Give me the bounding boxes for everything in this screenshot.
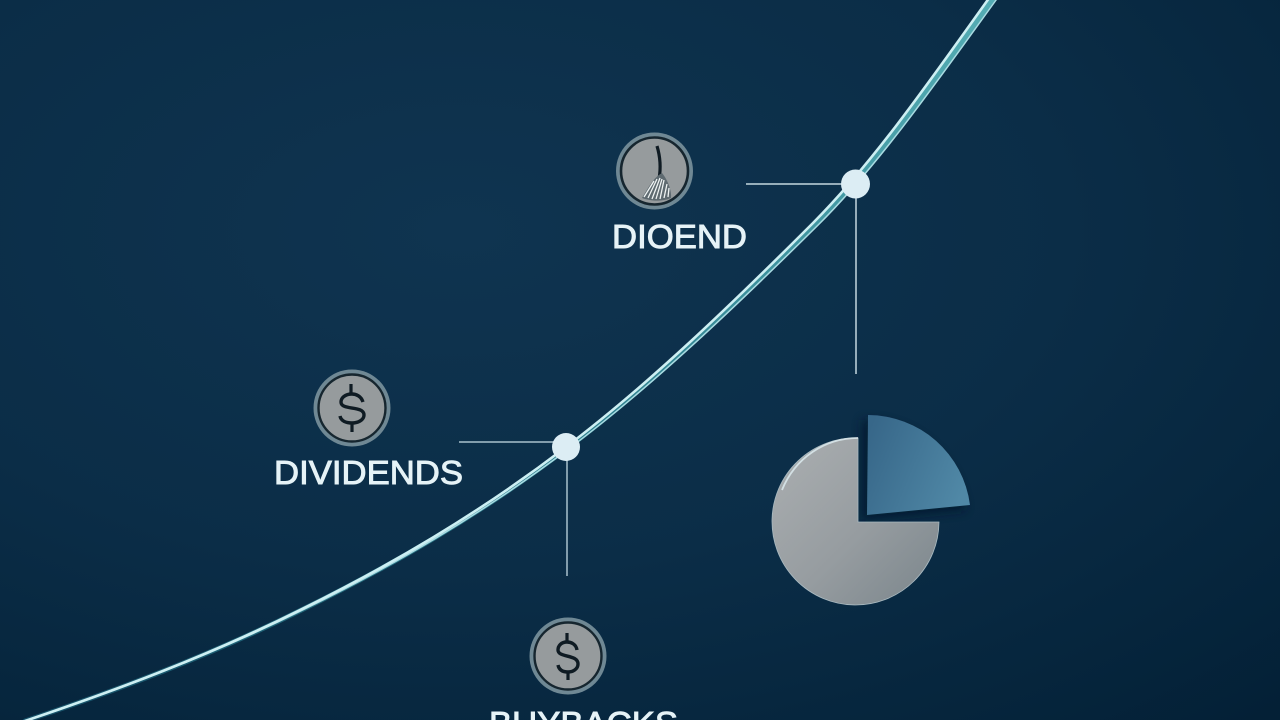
blue pie slice <box>867 415 970 515</box>
connector lines: lower point <box>459 442 567 576</box>
large grey pie slice <box>772 438 939 605</box>
connector lines: upper point <box>746 184 856 374</box>
lower curve marker <box>552 433 580 461</box>
pie chart <box>772 415 970 605</box>
label: DIOEND: DIOEND <box>612 218 747 255</box>
pie shadow <box>862 420 965 520</box>
label: DIVIDENDS: DIVIDENDS <box>274 454 463 491</box>
upper curve marker <box>841 170 870 198</box>
icon: dollar coin for buybacks <box>530 618 606 694</box>
growth curve <box>25 0 998 720</box>
pie highlight edge <box>782 438 858 490</box>
icon: dollar coin for dividends <box>314 370 390 446</box>
icon: broom-like dividend glyph <box>616 132 693 210</box>
